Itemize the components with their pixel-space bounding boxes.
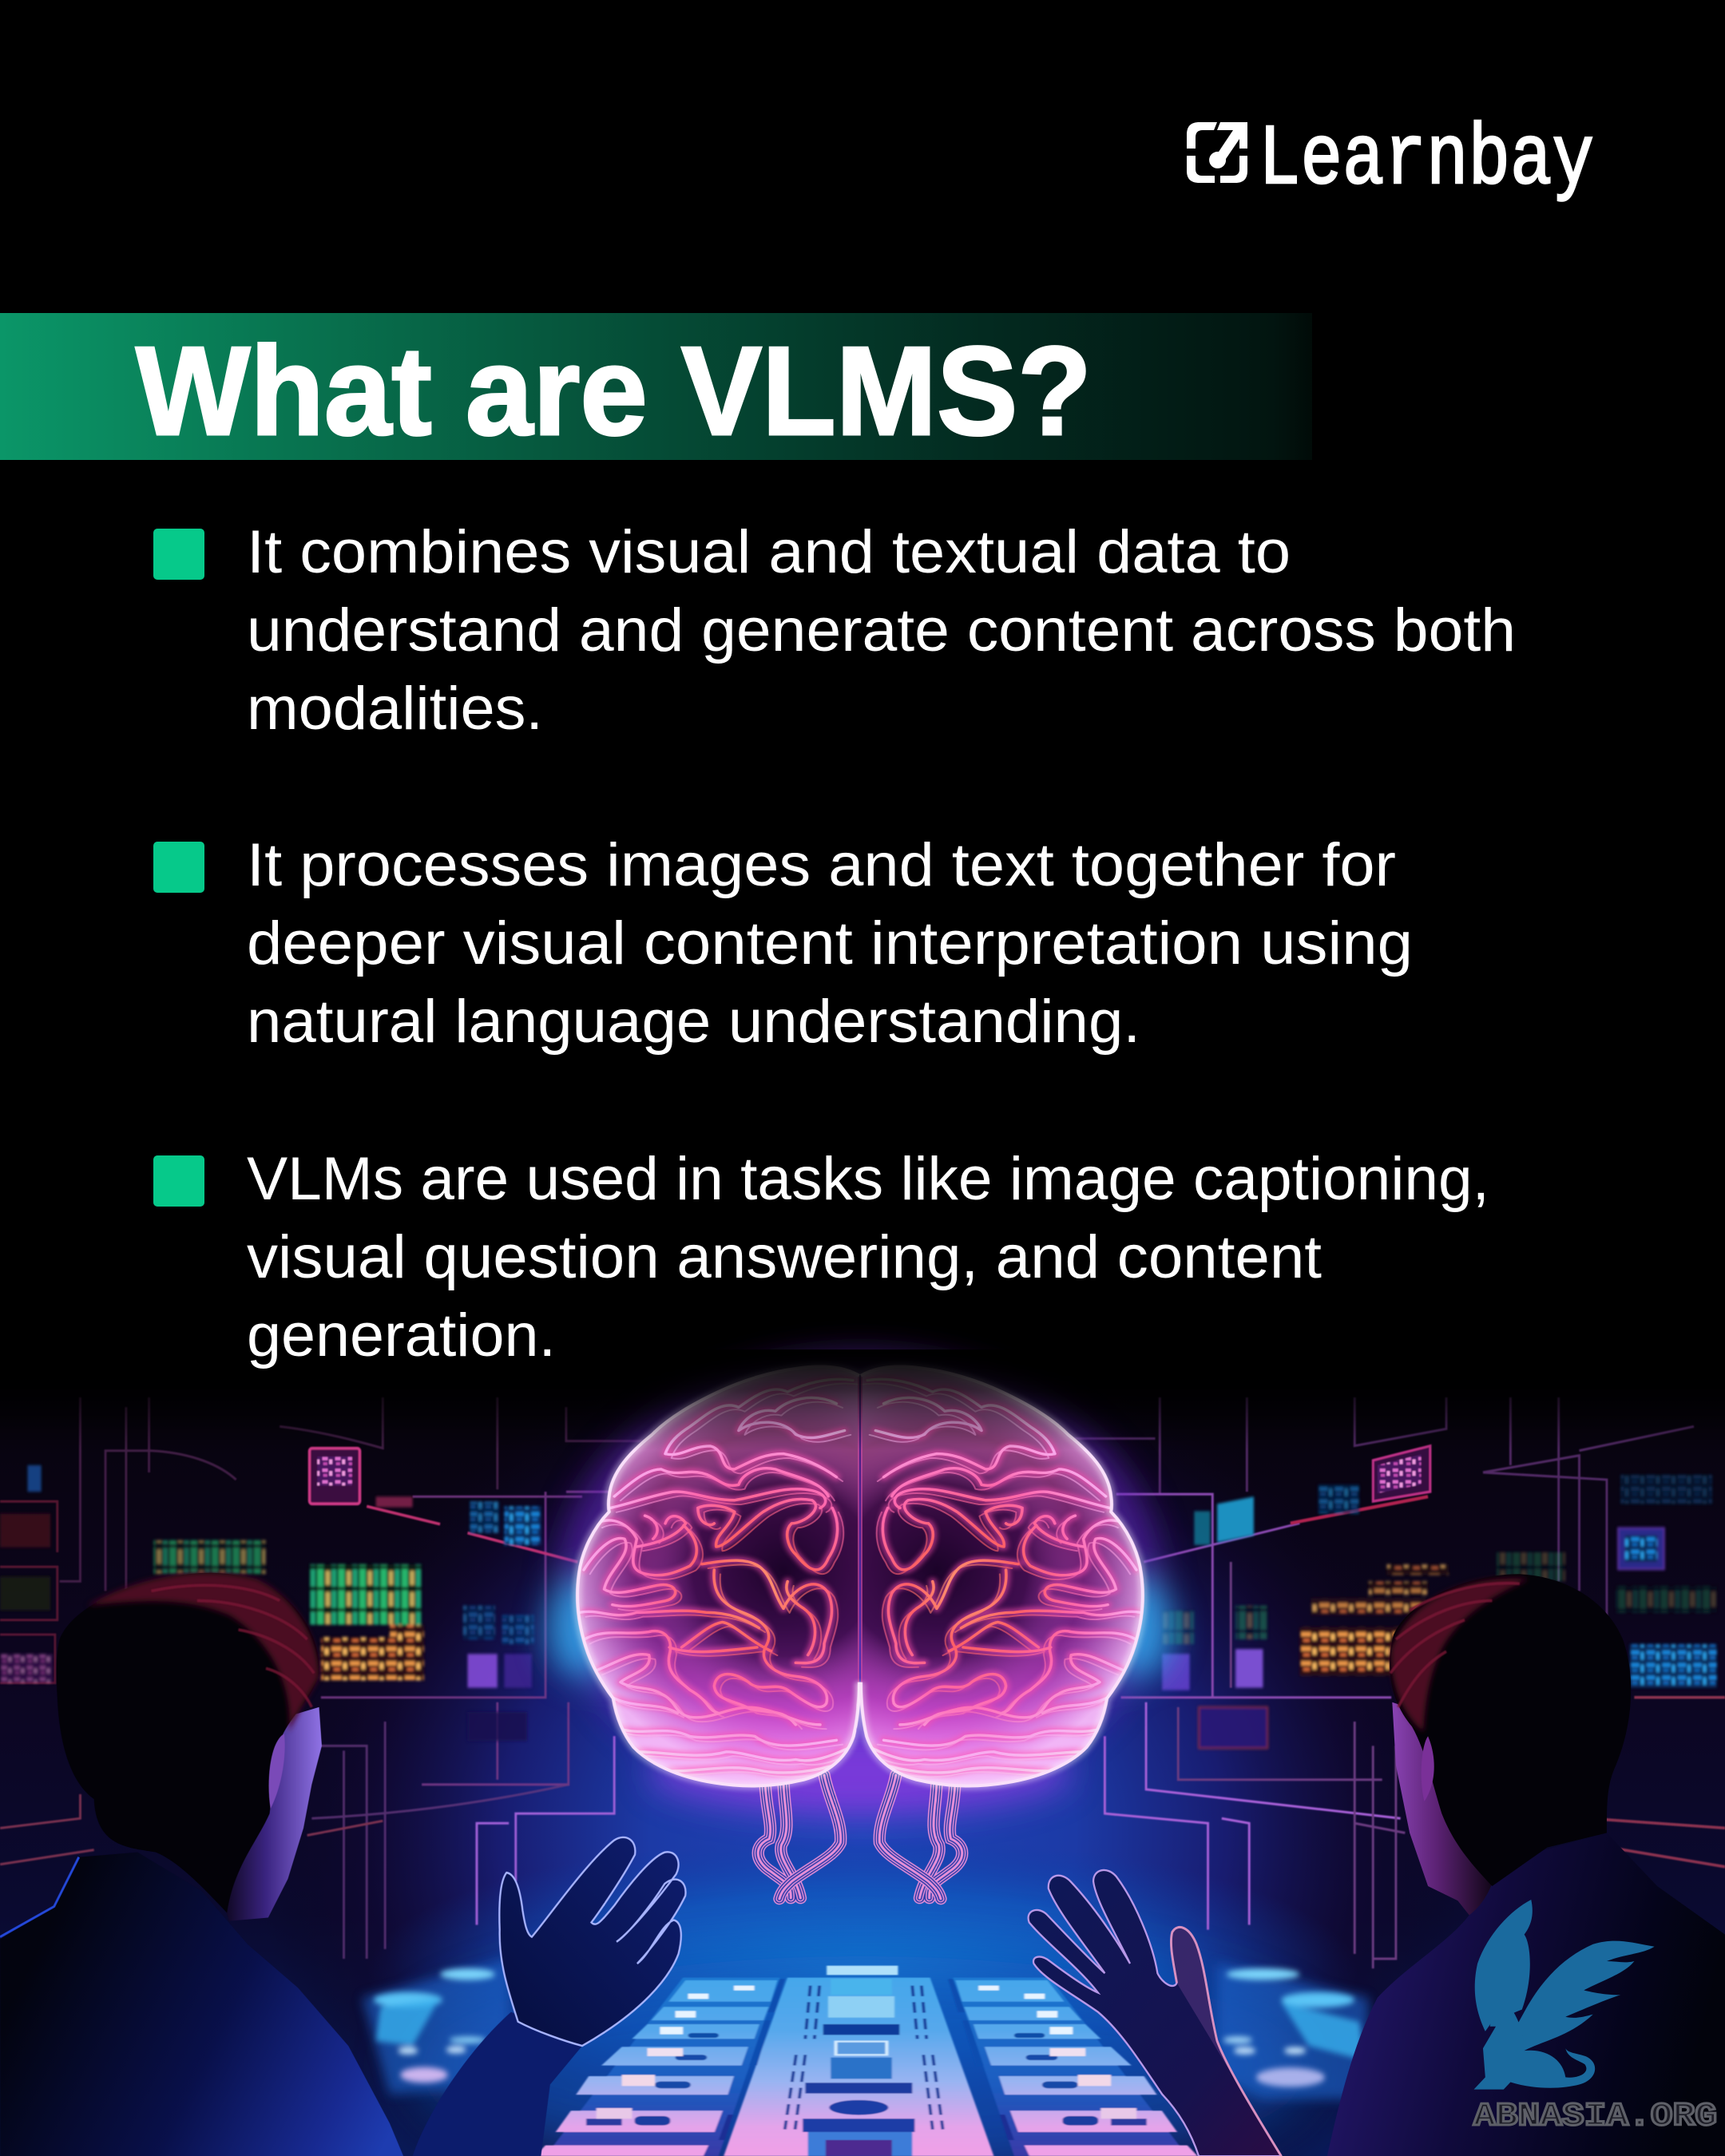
right side glow panel (1217, 1964, 1368, 2099)
board right panels (948, 1978, 1198, 2156)
head silhouette (57, 1573, 319, 1912)
ear (1422, 1736, 1434, 1801)
illustration: two people and a glowing brain over a control board (0, 1349, 1725, 2156)
left hemisphere (577, 1366, 859, 1786)
ear (269, 1734, 285, 1809)
bullet text (247, 1145, 1489, 1369)
bullet text: understand and generate content across both (247, 596, 1516, 664)
watermark text: ABNASIA.ORG (1473, 2099, 1717, 2135)
screen: pink monitor (1291, 1446, 1430, 1524)
banner gradient bar (0, 313, 1312, 460)
circuit lines and screens, left side (0, 1397, 664, 1959)
soft glow beneath the board (415, 1956, 1310, 2156)
scene backdrop (0, 1349, 1725, 2156)
board centre column (724, 1966, 993, 2156)
bullet 2 (153, 831, 1413, 1056)
bullet marker (153, 529, 204, 580)
bullet text: deeper visual content interpretation using (247, 910, 1413, 977)
logo icon (1187, 122, 1247, 183)
top fade into black (0, 1349, 1725, 1685)
bullet text: It processes images and text together for (247, 831, 1396, 899)
brain halo (547, 1353, 1173, 1817)
logo: Learnbay (1187, 112, 1594, 209)
head silhouette (1390, 1574, 1631, 1886)
shirt rim light (0, 1857, 79, 1937)
right hand warm rim (1171, 1927, 1281, 2156)
title: What are VLMS? (136, 321, 1092, 462)
right hemisphere (861, 1366, 1143, 1786)
neck and face (216, 1707, 322, 1921)
control board with chips (535, 1966, 1198, 2156)
bullet text (247, 518, 1516, 743)
bullet text: generation. (247, 1302, 556, 1369)
bullet 3 (153, 1145, 1489, 1369)
bullet text: modalities. (247, 675, 543, 743)
glowing brain (547, 1353, 1173, 1899)
hair sheen (1390, 1579, 1529, 1731)
right person seen from behind (1029, 1574, 1725, 2156)
left hand (499, 1837, 685, 2046)
title banner (0, 313, 1312, 462)
left arm sleeve (413, 2012, 582, 2156)
circuit lines and screens, right side (1066, 1397, 1725, 1968)
left person seen from behind (0, 1573, 685, 2156)
screen: green data panels (153, 1540, 424, 1681)
board left panels (535, 1978, 785, 2156)
watermark: griffin emblem and ABNASIA.ORG (1473, 1900, 1717, 2135)
bullet 1 (153, 518, 1516, 743)
shirt (1327, 1833, 1725, 2156)
bullet marker (153, 842, 204, 893)
neck and face (1392, 1702, 1501, 1915)
logo wordmark: Learnbay (1259, 112, 1594, 209)
bullet text: VLMs are used in tasks like image captioning, (247, 1145, 1489, 1213)
bullet text: visual question answering, and content (247, 1223, 1322, 1291)
griffin emblem (1473, 1900, 1655, 2090)
screens: small blue and purple panels (1162, 1475, 1717, 1748)
screens: small blue and purple panels (0, 1465, 541, 1741)
bullet text (247, 831, 1413, 1056)
neural cords (758, 1775, 962, 1899)
hair sheen (87, 1573, 319, 1731)
right hand and arm (1029, 1870, 1281, 2156)
screen: pink monitor (309, 1449, 360, 1504)
bullet marker (153, 1155, 204, 1207)
left side glow panel (362, 1959, 509, 2095)
bullet text: It combines visual and textual data to (247, 518, 1291, 586)
shirt (0, 1853, 403, 2156)
screen: orange data display (1299, 1564, 1449, 1675)
bullet text: natural language understanding. (247, 988, 1140, 1056)
